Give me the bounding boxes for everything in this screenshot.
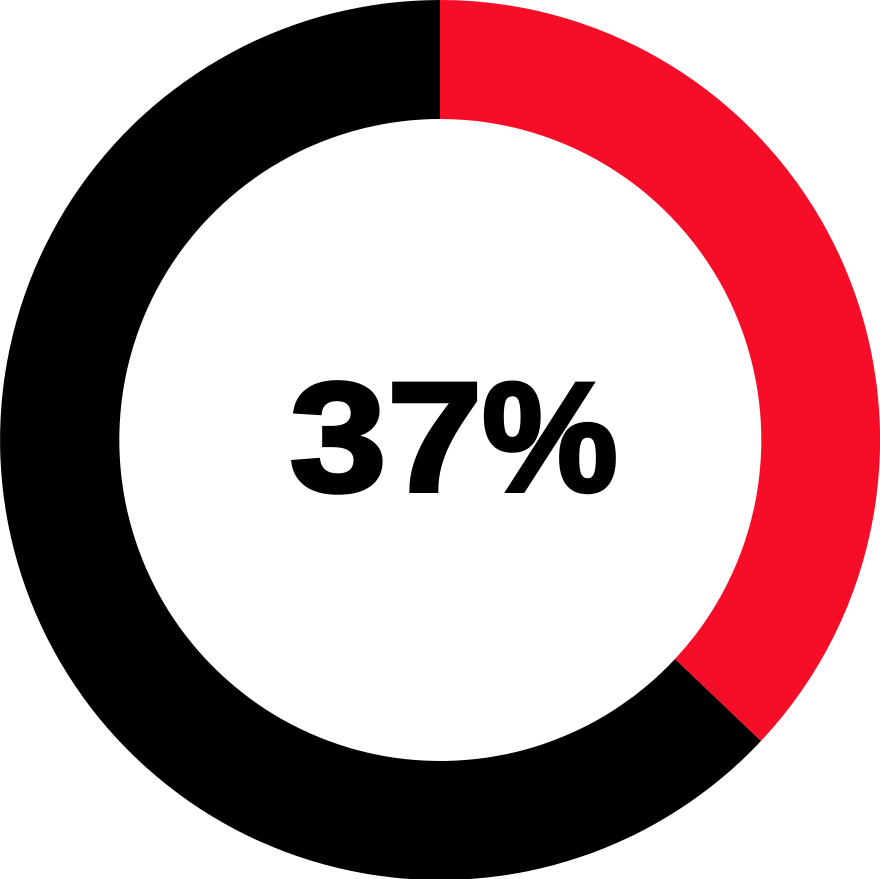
center value label: 7	[387, 350, 482, 524]
center value label	[290, 350, 618, 525]
ring segment: 37% in red	[440, 0, 880, 741]
center value label: 3	[290, 351, 387, 525]
center value label: %	[482, 350, 618, 524]
